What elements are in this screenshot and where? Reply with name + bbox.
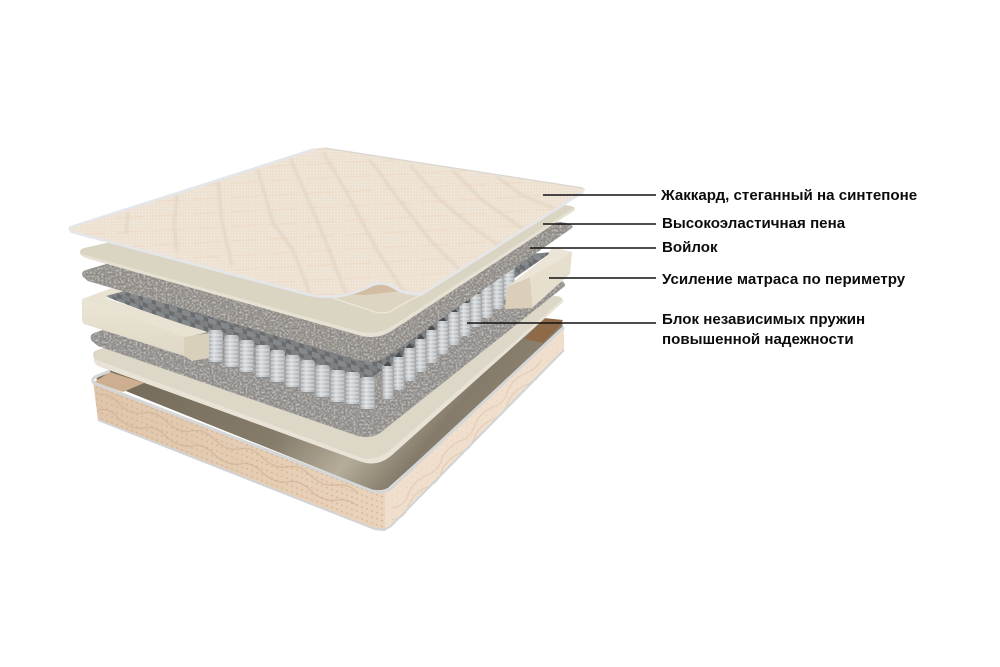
upper felt layer xyxy=(82,222,572,362)
label: jacquard: Жаккард, стеганный на синтепоне xyxy=(660,187,917,204)
cover side panel with waves xyxy=(93,327,564,531)
leader line: jacquard xyxy=(543,194,656,196)
back spring row, right side xyxy=(382,262,514,399)
label: spring block: Блок независимых пружин xyxy=(662,311,865,328)
perimeter foam, left piece xyxy=(82,288,215,361)
quilted jacquard top layer xyxy=(68,148,585,298)
label: felt: Войлок xyxy=(662,239,718,256)
cover back wall, brown corner xyxy=(525,318,563,343)
label: perimeter: Усиление матраса по периметру xyxy=(662,271,906,288)
bottom mattress cover xyxy=(93,318,564,531)
lower foam layer xyxy=(93,296,563,463)
quilt rim xyxy=(70,149,583,297)
lower felt layer xyxy=(90,279,565,437)
high-elastic foam layer xyxy=(80,205,575,337)
label: spring block: повышенной надежности xyxy=(662,331,854,348)
spring block xyxy=(104,252,552,410)
perimeter foam, right piece xyxy=(505,247,572,309)
spring tops xyxy=(104,252,552,380)
cover interior floor xyxy=(96,320,563,490)
leader line: foam xyxy=(543,223,656,225)
small inner layer under the curl xyxy=(333,283,422,313)
front spring row, left side xyxy=(208,330,375,410)
cover back wall, peach corner xyxy=(94,372,144,392)
label: foam: Высокоэластичная пена xyxy=(662,215,846,232)
leader line: springs xyxy=(467,322,656,324)
leader line: felt xyxy=(530,247,656,249)
quilting seams xyxy=(126,152,558,296)
leader line: perimeter xyxy=(549,277,656,279)
label: spring block xyxy=(662,311,865,348)
cover rim xyxy=(93,327,564,492)
